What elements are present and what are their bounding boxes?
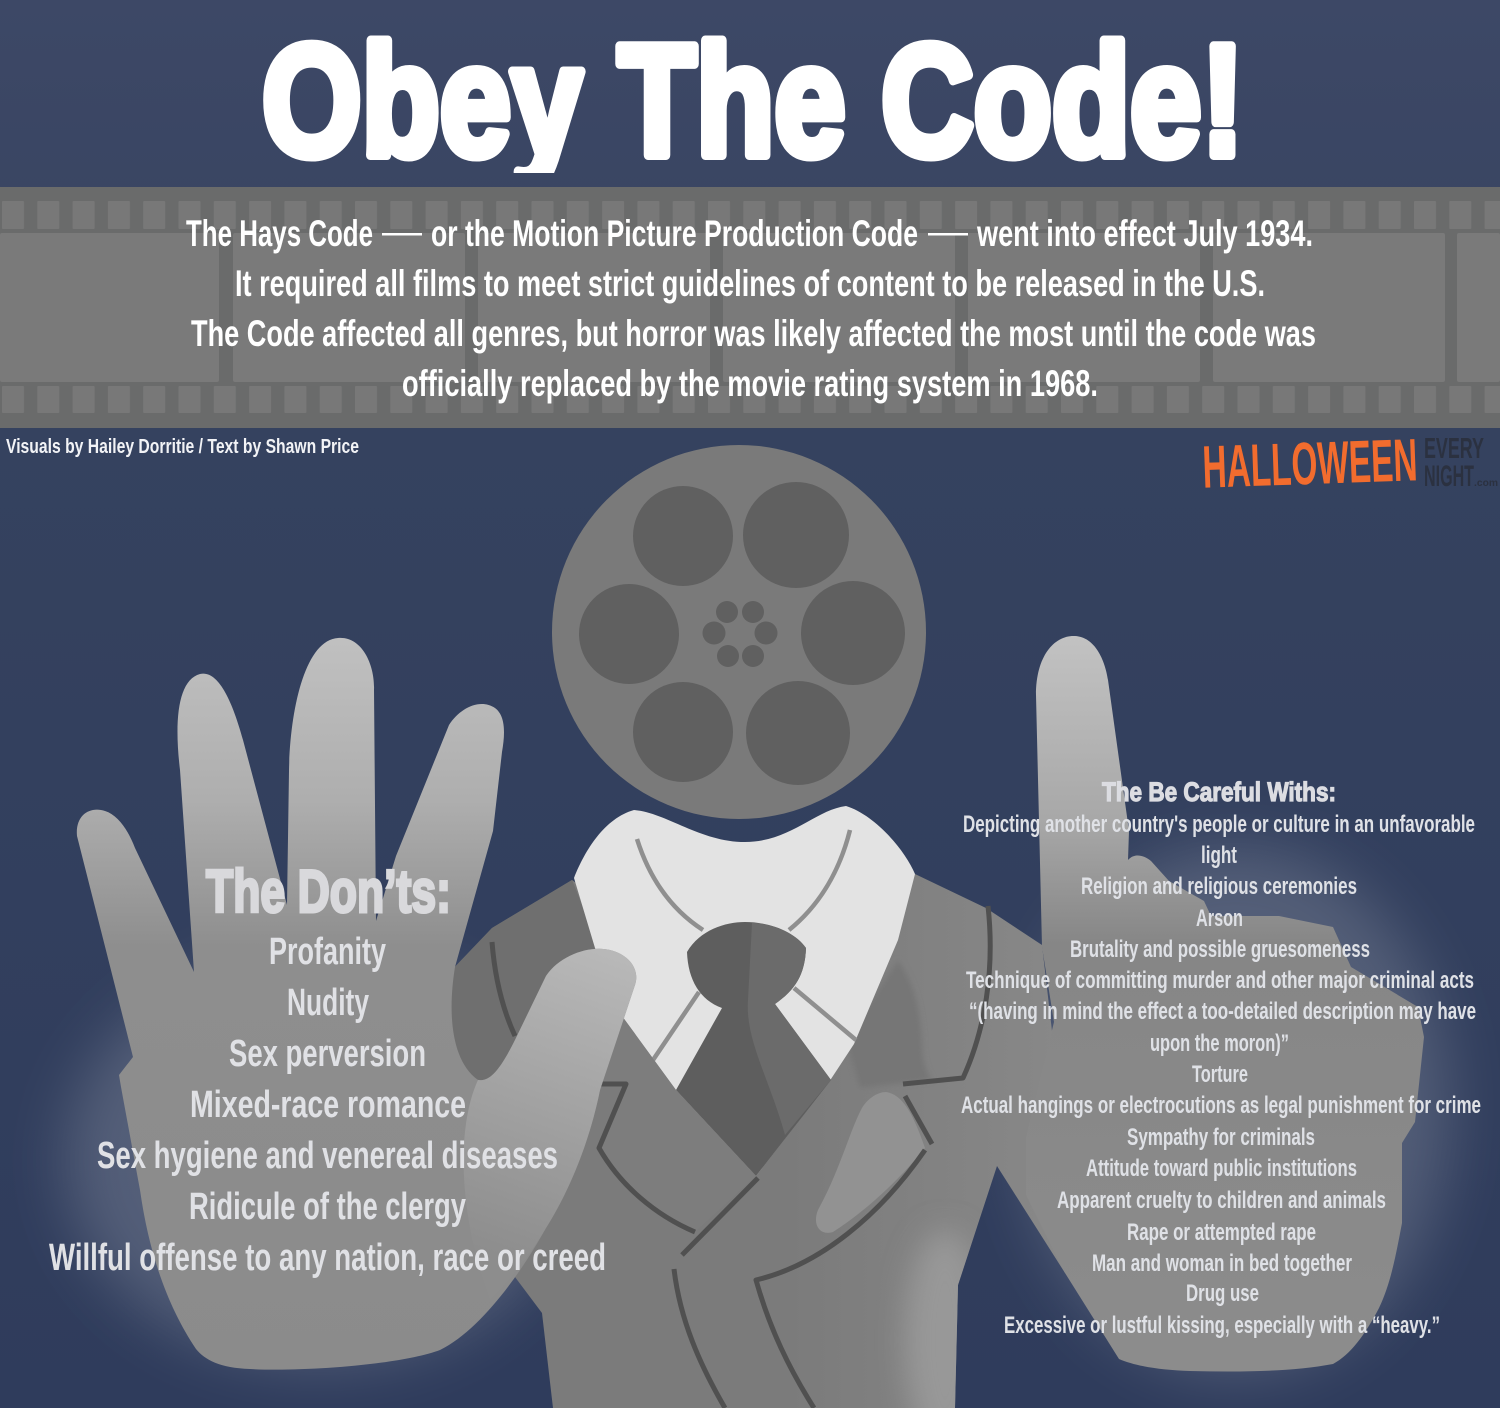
figure: suit jacket (449, 806, 1065, 1408)
panel: the be careful withs (961, 777, 1481, 1339)
left open hand (77, 638, 636, 1370)
list of be careful withs: light (1201, 842, 1237, 869)
glow behind right hand (1020, 845, 1450, 1375)
shoulder shading (449, 880, 600, 1080)
chest shadow (846, 960, 932, 1088)
list of don'ts (49, 931, 606, 1279)
glow behind left hand (65, 955, 575, 1365)
film frames (0, 233, 1500, 382)
list of be careful withs: Religion and religious ceremonies (1081, 873, 1357, 900)
long dashes (382, 233, 968, 236)
list of be careful withs: upon the moron)” (1150, 1030, 1289, 1057)
film strip banner (0, 187, 1500, 428)
film sprocket holes (0, 201, 1500, 413)
reel holes (579, 482, 905, 785)
intro text block: or the Motion Picture Production Code (431, 213, 918, 254)
title: Obey The Code! (262, 13, 1244, 189)
heading: the be careful withs: The Be Careful Withs: (1102, 777, 1336, 807)
list of be careful withs: Torture (1192, 1061, 1248, 1088)
list of be careful withs: Sympathy for criminals (1127, 1124, 1315, 1151)
shirt (574, 806, 915, 1176)
collar lines (637, 830, 856, 1060)
list of don'ts: Willful offense to any nation, race or creed (49, 1237, 606, 1279)
list of be careful withs: Drug use (1186, 1280, 1259, 1307)
shoulder seam (492, 942, 515, 1036)
heading: the don'ts: The Don’ts: (206, 858, 451, 925)
list of be careful withs: Attitude toward public institutions (1086, 1155, 1357, 1182)
list of be careful withs: Rape or attempted rape (1127, 1219, 1316, 1246)
intro text block: went into effect July 1934. (976, 213, 1313, 254)
list of be careful withs (961, 811, 1481, 1339)
necktie (676, 922, 831, 1176)
list of don'ts: Ridicule of the clergy (189, 1186, 466, 1228)
list of don'ts: Nudity (287, 982, 369, 1024)
jacket seam lines (597, 906, 990, 1408)
lapel shading (596, 950, 756, 1232)
film reel head (552, 445, 926, 819)
logo: Halloween Every Night: .com (1474, 478, 1498, 489)
list of don'ts: Sex perversion (229, 1033, 426, 1075)
credits: Visuals by Hailey Dorritie / Text by Shawn Price (6, 435, 359, 458)
intro text block: officially replaced by the movie rating system in 1968. (402, 363, 1098, 404)
panel: the don'ts (49, 858, 606, 1279)
right pointing hand (1026, 636, 1424, 1371)
jacket light lower right (905, 1230, 985, 1408)
list of don'ts: Sex hygiene and venereal diseases (97, 1135, 558, 1177)
list of be careful withs: Man and woman in bed together (1092, 1250, 1352, 1277)
thumb (464, 949, 636, 1300)
intro text block: The Hays Code (186, 213, 373, 254)
intro text block (186, 213, 1316, 404)
list of be careful withs: Arson (1196, 905, 1243, 932)
list of don'ts: Mixed-race romance (190, 1084, 466, 1126)
list of be careful withs: Brutality and possible gruesomeness (1070, 936, 1370, 963)
list of don'ts: Profanity (269, 931, 386, 973)
